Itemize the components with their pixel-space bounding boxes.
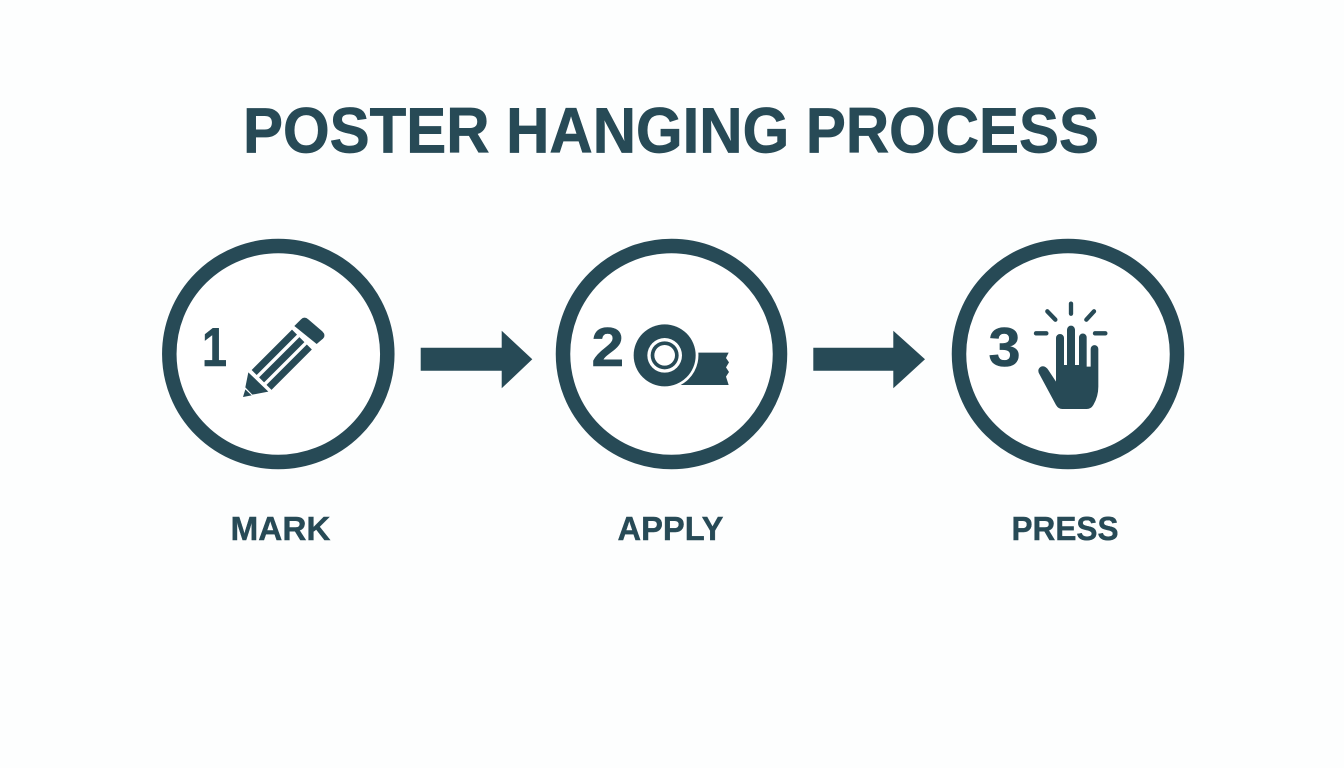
step 3 number: 3 [988,316,1020,378]
step 1 label: MARK [230,511,330,548]
step 1 number: 1 [202,316,227,378]
step 1: mark [169,246,387,548]
icon: pressing hand [1036,304,1105,409]
arrow: step 1 to step 2 [421,331,532,388]
arrow: step 2 to step 3 [813,331,925,388]
step 2 circle [563,246,780,462]
step 2 number: 2 [592,316,624,378]
step 2: apply [563,246,780,548]
title: POSTER HANGING PROCESS [243,95,1099,167]
icon: pencil [243,318,325,397]
step 2 label: APPLY [618,511,724,548]
step 1 circle [169,246,387,462]
step 3 circle [959,246,1177,462]
step 3: press [959,246,1177,548]
icon: tape roll [634,324,729,386]
step 3 label: PRESS [1012,511,1118,548]
